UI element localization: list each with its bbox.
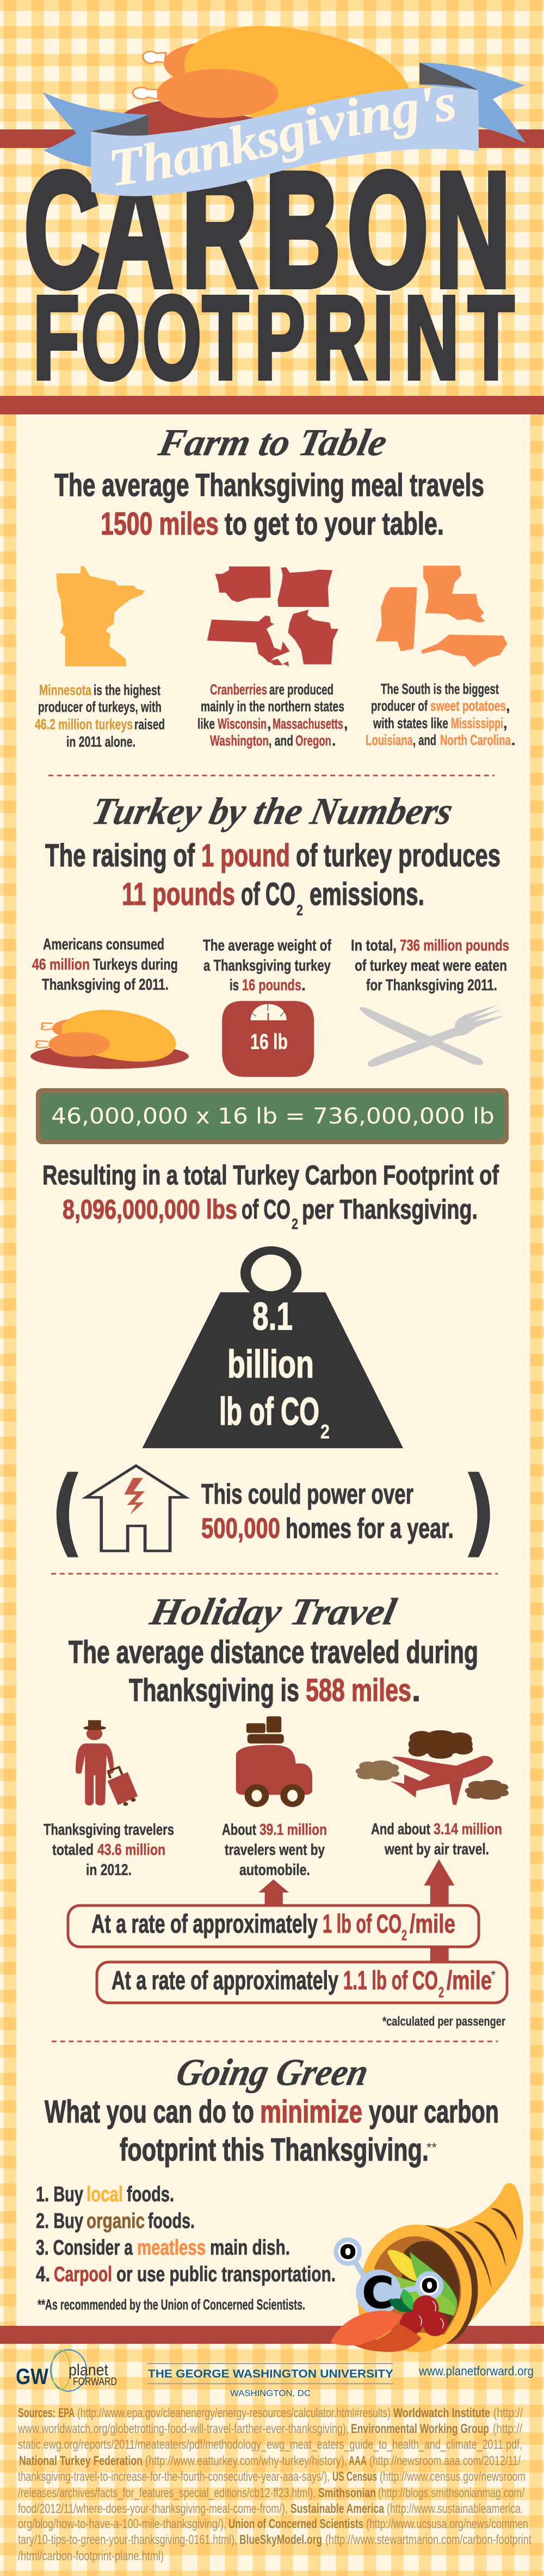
text: average weight [203,937,331,994]
icon: Minnesota map [56,566,145,666]
ribbon banner [42,63,526,196]
logo: GW Planet Forward: GW [16,2364,48,2389]
headline: minimize footprint: What you can do to [45,2094,254,2130]
icon: house with lightning bolt [86,1466,186,1551]
sources text block: (http:// [493,2422,522,2436]
footnote: Union of Concerned Scientists: **As recommended by the Union of Concerned Scientists. [38,2296,305,2313]
headline: total footprint: per Thanksgiving. [302,1194,478,1225]
callout: car rate: /mile [410,1910,455,1939]
section: Farm to Table [35,422,516,750]
text: cranberries: . [332,733,336,749]
text: travelers total: Thanksgiving travelers [44,1821,174,1839]
text: travelers total: totaled [52,1841,94,1859]
headline: pounds of CO2: The raising of [45,838,195,873]
icon: car with luggage [236,1716,312,1804]
text: Minnesota turkeys [35,682,165,750]
logo: The George Washington University [147,2363,393,2398]
logo: GW Planet Forward: planet [69,2361,109,2379]
list: four tips: organic [86,2209,145,2233]
text: the South: , [503,715,508,731]
text: turkeys consumed [32,936,178,994]
sources text block: /releases/archives/facts_for_features_special_editions/cb12-ff23.html), [18,2486,316,2500]
red band: bottom [0,2326,544,2344]
text: air travelers [371,1821,502,1858]
logo: The George Washington University: THE GEORGE WASHINGTON UNIVERSITY [148,2368,393,2380]
list: four tips: foods. [148,2209,195,2233]
section: Turkey by the Numbers [30,791,509,1557]
icon: plane and clouds [356,1730,509,1805]
text: the South: , and [413,732,436,748]
text: power homes: homes for a year. [286,1513,454,1544]
callout: plane rate: 1.1 lb of CO [343,1966,438,1995]
sources text block: Union of Concerned Scientists [228,2517,363,2531]
text: cranberries: Wisconsin [218,716,267,732]
text: automobile travelers [222,1821,327,1879]
list: four tips: foods. [127,2183,174,2206]
callout: plane rate: At a rate of approximately [112,1966,338,1995]
headline: minimize footprint: minimize [260,2094,362,2130]
icon: CO2 molecule: O [340,2242,356,2263]
headline: minimize footprint: ** [426,2140,437,2155]
text: automobile travelers: 39.1 million [259,1821,327,1839]
text: air travelers: 3.14 million [434,1821,502,1838]
text: the South: , [506,698,510,714]
list: four tips: local [86,2183,123,2206]
list: four tips: 4. [36,2263,50,2286]
icon: CO2 molecule [333,2238,443,2318]
callout: plane rate: 2 [438,1984,444,2001]
footer: logos [16,2350,534,2398]
icon: bathroom scale: 16 lb [250,1030,288,1054]
headline: total footprint [42,1160,499,1232]
list: four tips: 3. Consider a [36,2236,133,2260]
headline: average distance: 588 miles [306,1673,411,1708]
text: the South: sweet potatoes [430,698,506,714]
sources text block: US Census [332,2469,377,2484]
text: air travelers: went by air travel. [384,1841,489,1858]
turkey illustration [123,26,410,134]
logo: GW Planet Forward: FORWARD [73,2376,117,2388]
headline: meal travels [54,468,484,542]
callout: powers homes [57,1466,490,1557]
text: the South: producer of [371,698,428,714]
text: average weight: is [230,977,239,994]
callout: car rate: 2 [401,1927,407,1944]
icon: weight 8.1 billion lb [142,1250,403,1448]
callout: plane rate [97,1962,507,2003]
sources text block: Sustainable America [290,2501,384,2516]
icon: turkey on plate [30,1010,189,1069]
text: average weight: . [301,977,306,994]
text: power homes: This could power over [201,1479,413,1510]
parentheses [57,1472,490,1557]
text: turkeys consumed: Turkeys during [93,956,178,973]
section: Going Green [36,2052,523,2352]
icon: bathroom scale [222,1001,314,1077]
headline: pounds of CO2: emissions. [310,877,424,912]
text: cranberries: are produced [269,681,333,698]
text: power homes: 500,000 [201,1513,280,1544]
sources text block: tary/10-tips-to-green-your-thanksgiving-0161.html), [18,2532,237,2547]
text: total pounds [351,937,509,994]
heading: Going Green: Going Green [173,2052,372,2094]
red band: top [0,129,544,148]
icon: CO2 molecule: O [422,2275,437,2296]
text: automobile travelers: travelers went by [225,1841,325,1859]
list: four tips: 2. Buy [36,2209,83,2233]
text: cranberries: , and [269,733,293,749]
text: travelers total [44,1821,174,1879]
callout: plane rate: * [491,1968,496,1983]
text: power homes [201,1479,454,1544]
word: FOOTPRINT: FOOTPRINT [33,271,514,404]
icon: weight 8.1 billion lb: billion [227,1343,314,1386]
text: cranberries: like [197,716,215,732]
callout: car rate: 1 lb of CO [323,1910,401,1939]
text: average weight: The average weight of [203,937,331,954]
sources text block: National Turkey Federation [19,2454,143,2468]
red band: below title [0,396,544,414]
headline: pounds of CO2: 2 [296,902,303,918]
headline: meal travels: 1500 miles [101,506,219,542]
text: cranberries: , [267,716,271,732]
text: the South: . [511,732,516,748]
headline: minimize footprint: footprint this Thanksgiving. [120,2132,429,2168]
chalkboard equation: 46,000,000 x 16 lb = 736,000,000 lb [51,1104,494,1129]
text: the South [366,681,516,748]
arrow: plane emissions rate [424,1859,455,1963]
sources text block: Sources: [18,2406,55,2420]
list: four tips: or use public transportation. [116,2263,336,2286]
heading: Holiday Travel: Holiday Travel [146,1591,400,1633]
text: cranberries: , [344,716,348,732]
title header [24,26,526,404]
text: cranberries: mainly in the northern states [201,698,344,715]
arrow: car emissions rate [258,1879,289,1906]
icon: weight 8.1 billion lb: lb of CO [219,1391,319,1433]
word: CARBON: CARBON [24,139,511,321]
sources text block: org/blog/how-to-have-a-100-mile-thanksgiving/), [18,2517,226,2531]
text: total pounds: In total, [351,937,397,954]
text: Minnesota turkeys: 46.2 million turkeys [35,716,133,733]
icon: crossed fork and knife [360,1004,505,1067]
heading: Farm to Table: Farm to Table [155,422,391,464]
sources text block: www.worldwatch.org/globetrotting-food-will-travel-farther-ever-thanksgiving), [17,2422,349,2436]
sources text block: Worldwatch Institute [393,2406,490,2420]
headline: total footprint: of CO [242,1194,290,1225]
text: average weight: a Thanksgiving turkey [203,957,331,974]
text: turkeys consumed: 46 million [32,956,90,973]
logo: The George Washington University: WASHINGTON, DC [230,2389,311,2398]
headline: pounds of CO2: 1 pound [201,838,290,873]
callout: plane rate: /mile [447,1966,492,1995]
section: Holiday Travel [44,1591,509,2029]
icon: weight 8.1 billion lb: 8.1 [252,1295,293,1338]
callout: car rate [68,1905,479,1947]
text: Minnesota turkeys: in 2011 alone. [66,734,135,750]
text: the South: Louisiana [366,732,413,748]
list: four tips: 1. Buy [36,2183,83,2206]
text: turkeys consumed: Americans consumed [43,936,164,953]
text: Minnesota turkeys: is the highest [94,682,160,698]
text: total pounds: of turkey meat were eaten [355,957,507,974]
text: the South: Mississippi [451,715,503,731]
headline: pounds of CO2 [45,838,500,918]
footnote: per passenger: *calculated per passenger [382,2014,505,2029]
website link text: www.planetforward.org [418,2364,534,2378]
icon: CO2 molecule: C [362,2268,393,2318]
sources text block: EPA [58,2406,75,2420]
list: four tips: Carpool [54,2263,112,2286]
headline: average distance: Thanksgiving is [129,1673,299,1708]
text: the South: with states like [373,715,448,731]
heading: Turkey by the Numbers: Turkey by the Numbers [89,791,456,833]
list: four tips: main dish. [210,2236,290,2260]
text: automobile travelers: About [222,1821,256,1839]
list: four tips: meatless [137,2236,206,2260]
sources text block: (http://www.epa.gov/cleanenergy/energy-resources/calculator.html#results) [77,2406,391,2420]
callout: car rate: At a rate of approximately [91,1910,318,1939]
sources text block: (http:// [493,2406,523,2420]
text: cranberries [197,681,348,749]
ribbon text: Thanksgiving's [112,88,455,186]
sources text block: /html/carbon-footprint-plane.html) [18,2549,164,2563]
text: the South: North Carolina [440,732,511,748]
text: Minnesota turkeys: producer of turkeys, with [38,699,162,715]
text: cranberries: Washington [210,733,269,749]
headline: meal travels: to get to your table. [225,506,444,542]
icon: cornucopia [330,2183,523,2352]
text: total pounds: 736 million pounds [400,937,509,954]
text: cranberries: Cranberries [210,681,267,698]
text: travelers total: 43.6 million [97,1841,165,1859]
text: Minnesota turkeys: raised [134,716,165,733]
icon: traveler with suitcase [76,1720,138,1806]
text: total pounds: for Thanksgiving 2011. [366,977,497,994]
icon: weight 8.1 billion lb: 2 [320,1420,330,1443]
headline: pounds of CO2: 11 pounds [122,877,235,912]
text: average weight: 16 pounds [242,977,301,994]
sources text block: Smithsonian [318,2486,376,2500]
logo: GW Planet Forward [16,2350,117,2391]
list: four tips [36,2183,336,2286]
text: Minnesota turkeys: Minnesota [39,682,92,698]
sources text block: AAA [349,2454,367,2468]
headline: average distance: . [412,1673,421,1708]
headline: total footprint: 8,096,000,000 lbs [63,1194,237,1225]
text: air travelers: And about [371,1821,430,1838]
text: travelers total: in 2012. [86,1861,132,1879]
sources text block [17,2406,531,2563]
sources text block: food/2012/11/where-does-your-thanksgiving-meal-come-from/), [18,2501,288,2516]
icon: cranberry states map [207,567,338,666]
sources text block: Environmental Working Group [351,2422,489,2436]
text: turkeys consumed: Thanksgiving of 2011. [42,976,169,994]
headline: pounds of CO2: of CO [241,877,295,912]
headline: total footprint: 2 [292,1215,298,1232]
text: cranberries: Oregon [295,733,331,749]
cream content panel [16,408,530,2333]
sources text block: (http://www.eatturkey.com/why-turkey/history), [145,2454,347,2468]
text: automobile travelers: automobile. [239,1861,310,1879]
icon: southern states map [376,566,507,667]
chalkboard equation [36,1088,509,1144]
sources text block: thanksgiving-travel-to-increase-for-the-fourth-consecutive-year-aaa-says/), [18,2469,330,2484]
headline: average distance [69,1635,478,1708]
headline: minimize footprint [45,2094,499,2168]
text: cranberries: Massachusetts [273,716,343,732]
sources text block: BlueSkyModel.org [239,2532,322,2547]
